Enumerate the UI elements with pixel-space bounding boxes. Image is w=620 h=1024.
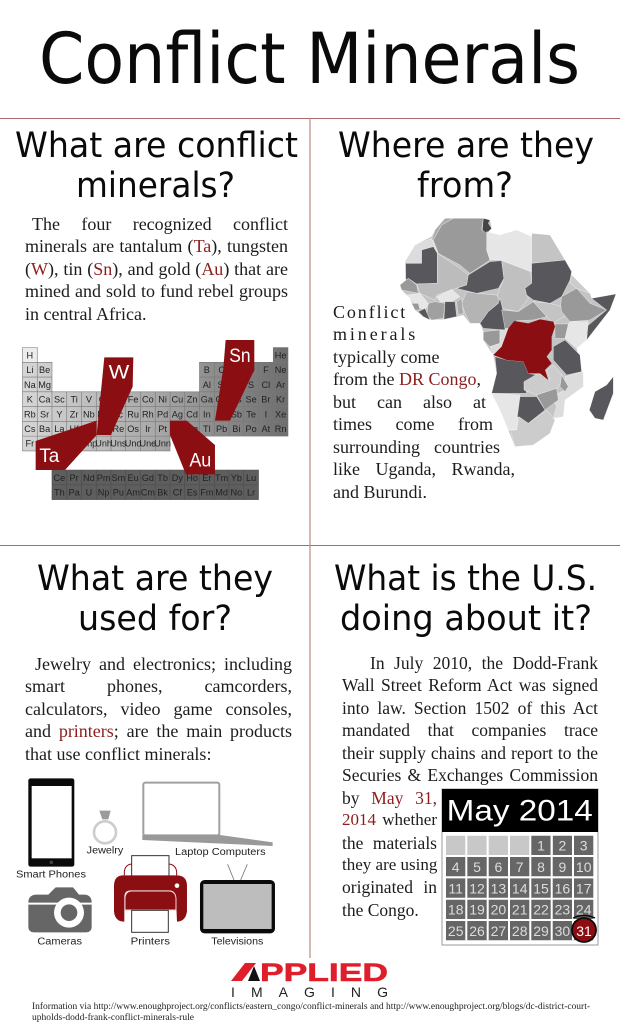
heading: what is the US doing: What is the U.S. [334,559,597,599]
chart: periodic table: H [27,350,33,360]
heading: what are conflict minerals: What are conflict [15,126,298,166]
text: origin: typically come [333,347,439,367]
chart: periodic table: Pu [113,488,124,498]
logo: Applied Imaging: IMAGING [231,984,388,1000]
chart: periodic table: Ta [84,424,95,434]
text: origin: like Uganda, Rwanda, [333,459,515,479]
chart: periodic table: Nd [83,473,95,483]
heading: what is the US doing: doing about it? [340,599,592,639]
chart: periodic table: Te [246,409,256,419]
chart: periodic table: Rn [275,424,286,434]
text: origin: surrounding countries [333,437,500,457]
calendar: May 2014: 22 [533,902,549,918]
chart: periodic table: Ho [186,473,198,483]
chart: periodic table: Ge [216,395,228,405]
chart: periodic table: Ni [158,395,167,405]
text: origin: but can also at [333,392,486,412]
chart: periodic table: Sb [231,409,242,419]
calendar: May 2014: 8 [537,859,545,875]
chart: periodic table: Cs [24,424,36,434]
text: origin: Conflict [333,302,407,322]
calendar: May 2014: 6 [495,859,503,875]
calendar: May 2014: 3 [580,838,588,854]
chart: periodic table: Nb [83,409,95,419]
chart: periodic table: N [233,365,240,375]
icon: printer [114,856,187,932]
panel: what is the US doing about it [334,559,598,946]
calendar: May 2014: 30 [555,923,570,939]
text: US action [342,653,598,920]
chart: periodic table: Sm [112,473,126,483]
calendar: May 2014: 18 [448,902,464,918]
calendar: May 2014: 5 [473,859,481,875]
chart: periodic table: S [248,380,254,390]
chart: periodic table: Am [126,488,140,498]
chart: periodic table: Zn [187,395,197,405]
chart: periodic table: Pb [216,424,227,434]
title: Conflict Minerals [39,18,580,100]
calendar: May 2014: 2 [559,838,567,854]
chart: periodic table: Unh [95,438,112,448]
chart: periodic table: Unn [154,438,171,448]
text: uses: and printers; are the main products [25,721,292,741]
text: origin: from the DR Congo, [333,369,481,389]
chart: periodic table: Pa [69,488,81,498]
calendar: May 2014: 19 [469,902,485,918]
chart: periodic table: Cu [172,395,183,405]
chart: periodic table: W [99,424,108,434]
calendar: May 2014: 23 [555,902,570,918]
chart: periodic table: K [27,395,33,405]
calendar: May 2014: 7 [516,859,524,875]
chart: periodic table: Tl [203,424,211,434]
chart: periodic table: Lr [247,488,255,498]
calendar: May 2014: 13 [491,880,506,896]
chart: periodic table: Re [113,424,124,434]
chart: periodic table: In [203,409,211,419]
chart: periodic table: V [86,395,93,405]
chart: periodic table: Ir [145,424,151,434]
calendar: May 2014: 10 [576,859,592,875]
chart: periodic table: Ne [275,365,286,375]
chart: periodic table: Rh [142,409,154,419]
chart: periodic table: Si [218,380,226,390]
text: US action: Securies & Exchanges Commission [342,765,598,785]
chart: periodic table: Ba [39,424,51,434]
chart: periodic table: Ca [39,395,51,405]
calendar: May 2014: 26 [469,923,485,939]
heading: what is the US doing [334,559,597,639]
chart: periodic table: Tc [114,409,123,419]
chart: periodic table: At [262,424,271,434]
calendar: May 2014: 28 [512,923,528,939]
chart: periodic table: Md [215,488,228,498]
chart: periodic table: Li [26,365,33,375]
chart: periodic table: U [86,488,92,498]
text: US action: In July 2010, the Dodd-Frank [370,653,598,673]
chart: periodic table: Bk [157,488,168,498]
text: source note: Information via http://www.enoughproject.org/conflicts/eastern_congo/conflict-minerals and http://www.enoughproject.org/blogs/dc-district-court- [32,1001,590,1012]
chart: periodic table: Os [127,424,139,434]
chart: periodic table: Ra [39,438,51,448]
chart: periodic table: Np [98,488,109,498]
chart: periodic table: Al [203,380,211,390]
calendar: May 2014: 17 [576,880,592,896]
chart: periodic table: He [275,350,286,360]
text: US action: the materials [342,832,437,852]
panel: where are they from [333,126,616,502]
chart: periodic table: Eu [128,473,139,483]
calendar: May 2014: 27 [491,923,506,939]
panel: what are they used for [16,559,292,947]
footer [32,959,590,1023]
chart: periodic table: Fm [200,488,214,498]
chart: periodic table: I [265,409,267,419]
calendar: May 2014: 14 [512,880,528,896]
calendar: May 2014: 25 [448,923,464,939]
text: origin: times come from [333,414,493,434]
chart: periodic table: Rb [24,409,36,419]
chart: periodic table [22,340,288,500]
chart: periodic table: Uns [110,438,127,448]
heading: where are they from: from? [417,166,513,206]
text: uses [25,654,292,764]
text: origin: minerals [333,324,418,344]
chart: periodic table: Sc [54,395,65,405]
icon: laptop [142,783,273,846]
chart: periodic table: Au [172,424,183,434]
chart: periodic table: Be [39,365,50,375]
icon: television [200,864,275,933]
chart: periodic table: Xe [275,409,286,419]
map: Africa [400,218,616,447]
chart: periodic table: Lu [246,473,256,483]
text: definition: The four recognized conflict [32,214,288,234]
text: source note: upholds-dodd-frank-conflict-minerals-rule [32,1012,194,1023]
chart: periodic table: Zr [70,409,78,419]
heading: where are they from [338,126,594,206]
chart: periodic table: Na [24,380,37,390]
chart: periodic table: Pt [158,424,167,434]
calendar: May 2014: May 2014 [447,795,593,828]
chart: periodic table: Ac [54,438,65,448]
text: US action: into law. Section 1502 of this Act [342,698,598,718]
icon labels: Laptop Computers [175,847,266,858]
chart: periodic table: Mo [97,409,110,419]
chart: periodic table: Hf [70,424,79,434]
chart: periodic table: Br [261,395,270,405]
text: US action: mandated that companies trace [342,720,598,740]
chart: periodic table: Cm [141,488,155,498]
logo: Applied Imaging [231,959,388,1000]
calendar: May 2014: 20 [491,902,506,918]
chart: periodic table: Es [187,488,198,498]
chart: periodic table: Cr [99,395,108,405]
chart: periodic table: P [233,380,239,390]
chart: periodic table: Ce [54,473,65,483]
text: US action: Wall Street Reform Act was signed [342,675,598,695]
calendar: May 2014 [442,789,598,945]
chart: periodic table: F [263,365,269,375]
heading: what are they used for: What are they [37,559,273,599]
chart: periodic table: Dy [172,473,183,483]
text: US action: their supply chains and report to the [342,743,598,763]
text: uses: Jewelry and electronics; including [35,654,292,674]
icons: products using conflict minerals [16,778,275,947]
calendar: May 2014: 9 [559,859,567,875]
chart: periodic table: Cl [262,380,270,390]
chart: periodic table: Ru [127,409,139,419]
chart: periodic table: Ar [276,380,285,390]
chart: periodic table: Gd [142,473,154,483]
chart: periodic table: Sn [229,346,251,367]
icon: camera [28,887,92,932]
chart: periodic table: Ga [201,395,214,405]
icon: smart phone [28,778,74,867]
chart: periodic table: Ti [70,395,78,405]
chart: periodic table: No [231,488,242,498]
heading: where are they from: Where are they [338,126,594,166]
logo: Applied Imaging: PPLIED [260,959,388,987]
chart: periodic table: Pr [70,473,79,483]
chart: periodic table: Pm [97,473,111,483]
text: US action: the Congo. [342,900,419,920]
chart: periodic table: As [231,395,242,405]
calendar: May 2014: 12 [469,880,485,896]
chart: periodic table: Tm [215,473,229,483]
text: origin [333,302,515,502]
chart: periodic table: Unp [80,438,97,448]
chart: periodic table: Er [202,473,211,483]
chart: periodic table: C [218,365,225,375]
chart: periodic table: Uno [125,438,142,448]
calendar: May 2014: 21 [512,902,528,918]
text: definition: in central Africa. [25,304,146,324]
chart: periodic table: Unq [66,438,83,448]
calendar: May 2014: 11 [448,880,463,896]
calendar: May 2014: 29 [533,923,549,939]
text: source note [32,1001,590,1023]
calendar: May 2014: 1 [537,838,545,854]
calendar: May 2014: 16 [555,880,570,896]
text: definition [25,214,288,324]
chart: periodic table: Ag [172,409,183,419]
icon labels: Televisions [211,936,263,947]
chart: periodic table: Au [189,451,211,472]
chart: periodic table: Kr [276,395,285,405]
icon labels [16,845,266,947]
icon labels: Printers [131,936,170,947]
icon labels: Jewelry [87,845,123,856]
chart: periodic table: Ta [39,446,60,467]
chart: periodic table: Pd [157,409,168,419]
icon: jewelry ring [94,811,116,843]
text: definition: (W), tin (Sn), and gold (Au) that are [25,259,288,279]
text: uses: calculators, video game consoles, [25,699,292,719]
chart: periodic table: La [54,424,65,434]
chart: periodic table: Tb [157,473,168,483]
chart: periodic table: Une [139,438,156,448]
text: US action: 2014 whether [342,810,437,829]
text: US action: originated in [342,877,437,897]
chart: periodic table: Th [54,488,65,498]
chart: periodic table: Bi [232,424,240,434]
heading: what are they used for: used for? [78,599,232,639]
chart: periodic table: B [204,365,210,375]
text: definition: minerals are tantalum (Ta), tungsten [25,236,288,256]
text: origin: and Burundi. [333,482,427,502]
chart: periodic table: Y [56,409,62,419]
icon labels: Cameras [37,936,82,947]
chart: periodic table: Mn [112,395,125,405]
panel: what are conflict minerals [15,126,298,500]
heading: what are they used for [37,559,273,639]
chart: periodic table: Po [246,424,257,434]
chart: periodic table: Co [142,395,154,405]
heading: what are conflict minerals: minerals? [76,166,235,206]
chart: periodic table: Sr [40,409,49,419]
heading: what are conflict minerals [15,126,298,206]
chart: periodic table: Sn [216,409,227,419]
icon labels: Smart Phones [16,869,86,880]
chart: periodic table: Cf [173,488,182,498]
text: definition: mined and sold to fund rebel groups [25,281,288,301]
text: US action: they are using [342,855,437,874]
chart: periodic table: O [248,365,255,375]
calendar: May 2014: 4 [452,859,460,875]
chart: periodic table: Yb [231,473,242,483]
chart: periodic table: Se [246,395,257,405]
text: uses: smart phones, camcorders, [25,676,292,696]
calendar: May 2014: 31 [576,923,592,939]
text: uses: that use conflict minerals: [25,744,211,764]
calendar: May 2014: 15 [533,880,549,896]
chart: periodic table: Fr [26,438,34,448]
chart: periodic table: Cd [186,409,198,419]
chart: periodic table: Fe [128,395,138,405]
text: US action: by May 31, [342,788,437,808]
chart: periodic table: W [109,363,130,384]
calendar: May 2014: 24 [576,902,592,918]
chart: periodic table: Hg [186,424,198,434]
chart: periodic table: Mg [38,380,51,390]
